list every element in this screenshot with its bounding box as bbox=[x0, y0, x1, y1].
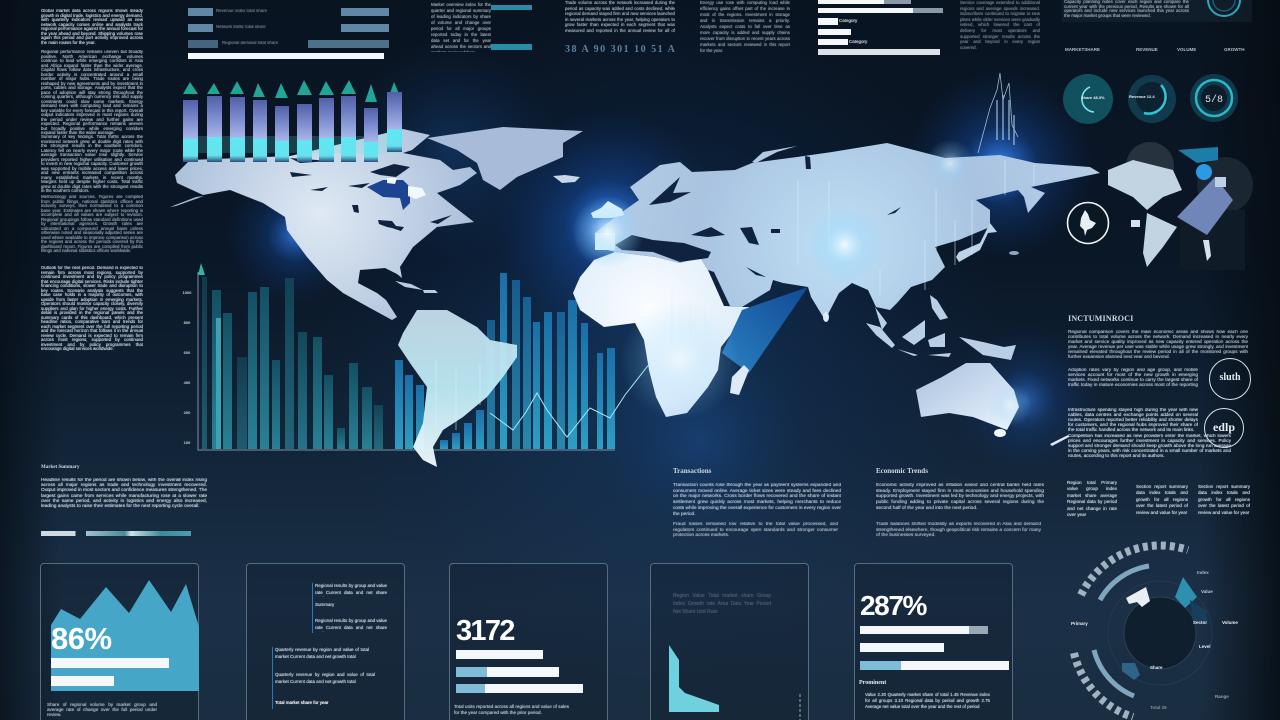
dial labels: Volume bbox=[1222, 620, 1238, 625]
Iceland bbox=[553, 175, 580, 183]
card 5 number: 287% bbox=[860, 590, 926, 621]
top right text panel bbox=[1062, 0, 1252, 22]
Indian Ocean light wedge bbox=[722, 287, 808, 373]
left text column: Outlook for the next period. Demand is expected to remain firm across most regions, supported by continued investment and by policy programmes that encourage digital services. Risks include tighter financing conditions, slower trade and disruption to key routes. Scenario analysis suggests that the base case holds in a majority of outcomes, with upside from faster adoption in emerging markets. Operators should monitor capacity closely, diversify suppliers and plan for higher energy costs. Further detail is provided in the regional panels and the summary cards of this dashboard, which present headline ratios, comparative bars and trends for each market segment over the full reporting period and the forecast horizon that follows it in the annual review cycle. Demand is expected to remain firm across most regions, supported by continued investment and by policy programmes that encourage digital services worldwide. bbox=[41, 266, 143, 351]
chart blue bars bbox=[395, 273, 615, 449]
Inland seas bbox=[615, 156, 901, 306]
left text column: Methodology and sources. Figures are compiled from public filings, national statistics offices and industry surveys, then normalised to a common base year. Estimates are shown where reporting is incomplete and all values are subject to revision. Regional groupings follow standard definitions used by international agencies. Growth rates are calculated on a compound annual basis unless otherwise noted and seasonally adjusted series are used where available to improve comparison across the regions and across the periods covered by this dashboard report. Figures are compiled from public filings and national statistics offices worldwide. bbox=[41, 195, 143, 253]
stacked columns bbox=[183, 92, 402, 162]
card 4: area chart bbox=[650, 563, 809, 720]
chart marker bbox=[198, 263, 205, 275]
Eurasia bbox=[595, 143, 1100, 320]
Aleutian trace bbox=[170, 196, 204, 207]
South America bbox=[398, 310, 517, 467]
mid text panel 2: Economic Trends bbox=[876, 467, 928, 475]
card 2 lower notes: Quarterly revenue by region and value of total market Current data and net growth total bbox=[275, 672, 375, 684]
chart trend line bbox=[490, 363, 650, 437]
mid text panel 2: Trade balances shifted modestly as exports recovered in Asia and demand strengthened elsewhere, though geopolitical risk remains a concern for many of the businesses surveyed. bbox=[876, 522, 1041, 538]
card 3: 3172: Total units reported across all regions and value of sales for the year compared with the prior period. bbox=[454, 704, 569, 714]
bird icon circle bbox=[1068, 202, 1108, 244]
dial labels bbox=[1071, 570, 1238, 710]
right panel heading: INCTUMINROCI bbox=[1068, 314, 1134, 323]
column markers bbox=[183, 80, 400, 102]
card 3: 3172 bbox=[449, 563, 608, 720]
UK and Iberia highlights bbox=[591, 201, 624, 250]
left lower text panel: Headline results for the period are shown below, with the overall index rising across all major regions as trade and technology investment recovered. Output improved in most sectors and confidence measures strengthened. The largest gains came from services while manufacturing rose at a slower rate over the same period, and activity in logistics and energy also increased, leading analysts to raise their estimates for the next reporting cycle overall. bbox=[41, 478, 207, 509]
left text column: Global market data across regions shows steady growth in digital trade, logistics and energy demand, with quarterly indicators revised upward as new network capacity comes online and analysts track regional performance against the annual forecast for the year ahead and beyond. Shipping volumes rose again this period and port activity improved across the main routes for the year. bbox=[41, 9, 143, 44]
lower legend bar bbox=[41, 531, 191, 536]
chart axes bbox=[198, 272, 615, 450]
text: 100 bbox=[184, 440, 190, 445]
Novaya Zemlya bbox=[752, 146, 797, 163]
card 5: 287%: Value 2.30 Quarterly market share of total 1.45 Revenue index for all groups 3.10 Regional data by period and growth 2.75 Average net value total over the year and the rest of period bbox=[865, 692, 990, 709]
mid text panel 1 bbox=[673, 467, 841, 538]
Southeast Asia islands bbox=[866, 295, 1016, 360]
radial dial bbox=[1071, 545, 1238, 717]
card 1: 86%: Share of regional volume by market group and average rate of change over the full period under review. bbox=[47, 702, 157, 717]
gauge labels: MARKETSHARE bbox=[1065, 47, 1100, 52]
top panel: text with heading bbox=[565, 0, 676, 55]
chart y-axis labels: 400 bbox=[184, 380, 190, 385]
card 1 area chart bbox=[51, 580, 199, 691]
New Zealand streak bbox=[1050, 435, 1069, 446]
card 3 number: 3172 bbox=[456, 615, 514, 647]
dial arcs bbox=[1094, 566, 1149, 696]
card 2 lower notes: Quarterly revenue by region and value of total market Current data and net growth total bbox=[275, 647, 369, 658]
top panel: text column: Energy use rose with computing load while efficiency gains offset part of the increase in most of the regions. Investment in storage and in transmission remains a priority. Analysts expect costs to fall over time as more capacity is added and supply chains recover from disruption in recent years across markets and sectors reviewed in this report for the year. bbox=[700, 0, 790, 53]
chart teal bars bbox=[202, 277, 383, 449]
right panel lower table: Section report summary data index totals and growth for all regions over the latest period of review and value for year bbox=[1198, 484, 1250, 515]
North America bbox=[175, 129, 477, 320]
Madagascar bbox=[730, 365, 749, 395]
chart y-axis labels: 1000 bbox=[183, 290, 191, 295]
chart y-axis labels: 200 bbox=[184, 410, 190, 415]
Caribbean islands bbox=[395, 281, 438, 293]
Africa bbox=[573, 252, 749, 417]
gauge 1 bbox=[1063, 74, 1113, 124]
mid text panel 1: Transactions bbox=[673, 467, 711, 475]
Australia bbox=[916, 363, 1019, 430]
gauge 1: Share 48.3% bbox=[1081, 95, 1105, 100]
top panel: right text: Service coverage extended to additional regions and average speeds increased. Subscribers continued to migrate to new plans while older services were gradually retired, which lowered the cost of delivery for most operators and supported stronger results across the year and beyond in every region covered. bbox=[960, 0, 1040, 50]
stat circle 1 bbox=[1209, 358, 1251, 400]
spike line chart bbox=[978, 73, 1018, 153]
right panel lower table bbox=[1067, 480, 1250, 518]
Pacific islet bbox=[1009, 251, 1019, 255]
dial labels: Primary bbox=[1071, 621, 1088, 626]
left text column: Summary of key findings. Total traffic across the monitored network grew at double digit rates with the strongest results in the southern corridors. Latency fell on nearly every major route while the average transaction value rose slightly. Service providers reported higher utilisation and continued to invest in new regional capacity. Customer growth was supported by mobile access and lower prices, and new entrants increased competition across many established markets in recent months. Margins held up despite higher costs. Total traffic grew at double digit rates with the strongest results in the southern corridors. bbox=[41, 135, 143, 193]
dial labels: Total 26 bbox=[1150, 705, 1167, 710]
top panel: bar table bbox=[188, 8, 389, 59]
dial tick ring bbox=[1074, 545, 1188, 717]
top panel: white bars bbox=[818, 0, 943, 55]
gauge labels: REVENUE bbox=[1136, 47, 1158, 52]
left text column: Regional performance remains uneven but broadly positive. North American exchange volumes continue to lead while emerging corridors in Asia and Africa expand faster than the wider average. Capital flows follow data infrastructure, and cross border activity is concentrated around a small number of major hubs. Trade routes are being reshaped by new agreements and by investment in ports, cables and storage. Analysts expect that the pace of adoption will stay strong throughout the coming quarters, although currency risk and supply constraints could slow some markets. Energy demand rises with computing load and remains a key variable for every forecast in this report. Overall output indicators improved in most regions during the period under review and further gains are expected. Regional performance remains uneven but broadly positive while emerging corridors expand faster than the wider average. bbox=[41, 50, 143, 135]
chart y-axis labels: 800 bbox=[184, 320, 190, 325]
mid text panel 2: Economic activity improved as inflation eased and central banks held rates steady. Employment stayed firm in most economies and household spending supported growth. Investment was led by technology and energy projects, with public funding adding to private capital across several regions during the second half of the year and into the next period. bbox=[876, 483, 1044, 511]
mid text panel 1: Fraud losses remained low relative to the total value processed, and regulators continued to encourage open standards and stronger consumer protection across markets. bbox=[673, 522, 838, 538]
stat circle 1: sluth bbox=[1219, 372, 1241, 383]
chart y-axis labels: 600 bbox=[184, 350, 190, 355]
card 2 upper notes: Summary bbox=[315, 602, 334, 607]
dial highlights bbox=[1126, 587, 1150, 607]
Japan bbox=[956, 223, 997, 262]
stat circle 2: edlp bbox=[1213, 420, 1235, 434]
mid text panel 2 bbox=[876, 467, 1044, 538]
card 4 dim table: Region Value Total market share Group Index Growth rate Area Data Year Period Net Share Unit Rate bbox=[673, 593, 771, 615]
dial labels: Index bbox=[1197, 570, 1209, 575]
gauge labels: VOLUME bbox=[1177, 47, 1196, 52]
dial labels: Sector bbox=[1193, 620, 1207, 625]
gauge labels: GROWTH bbox=[1224, 47, 1244, 52]
gauge 3 bbox=[1190, 74, 1238, 122]
card 2 lower notes: Total market share for year bbox=[275, 700, 329, 705]
card 5: 287% bbox=[854, 563, 1013, 720]
gauge 3: 5/8 bbox=[1205, 94, 1223, 106]
dial labels: Range bbox=[1215, 694, 1229, 699]
map hotspots bbox=[807, 207, 883, 283]
mid text panel 1: Transaction counts rose through the year as payment systems expanded and consumers moved online. Average ticket sizes were steady and fees declined on the major networks. Cross border flows recovered and the share of instant settlement grew quickly across most markets, helping merchants to reduce costs while improving the overall experience for customers in every region over the period. bbox=[673, 483, 841, 517]
left lower text panel: Market Summary bbox=[41, 465, 79, 470]
card 1: 86% bbox=[40, 563, 199, 720]
card 2 upper notes bbox=[312, 583, 388, 633]
top panel: text list bbox=[431, 2, 532, 52]
card 4 area bbox=[669, 645, 801, 720]
Arctic and lake details bbox=[290, 158, 452, 231]
top panel highlight bar bbox=[188, 53, 384, 59]
gauge labels bbox=[1065, 47, 1244, 52]
Sri Lanka bbox=[823, 312, 829, 322]
card 2 lower notes bbox=[272, 647, 371, 709]
dial labels: Share bbox=[1150, 665, 1163, 670]
right panel lower table: Section report summary data index totals and growth for all regions over the latest period of review and value for year bbox=[1136, 484, 1188, 515]
left text column bbox=[41, 9, 143, 352]
card 1 number: 86% bbox=[51, 621, 112, 656]
stat circle 2 bbox=[1204, 408, 1244, 448]
left lower text panel bbox=[41, 464, 207, 536]
Tasmania bbox=[994, 429, 1006, 437]
card 2: notes bbox=[246, 563, 405, 720]
mini world map bbox=[1108, 142, 1253, 270]
card 5: 287%: Prominent bbox=[859, 680, 886, 686]
top right gauge bbox=[1207, 0, 1241, 17]
gauge 2: Revenue 12.4 bbox=[1129, 94, 1155, 99]
column band bbox=[183, 136, 402, 153]
dial labels: Level bbox=[1199, 644, 1211, 649]
right panel lower table: Region total Primary value group index market share average Regional data by period and net change in rate over year bbox=[1067, 480, 1117, 517]
top panel: text with heading: 38 A 90 301 10 51 A bbox=[565, 44, 676, 55]
chart y-axis labels bbox=[182, 290, 192, 445]
map light streaks bbox=[436, 160, 1034, 430]
gauge 2 bbox=[1128, 75, 1176, 123]
Greenland bbox=[427, 127, 583, 190]
dial labels: Value bbox=[1201, 589, 1213, 594]
Hudson Bay bbox=[367, 180, 410, 210]
